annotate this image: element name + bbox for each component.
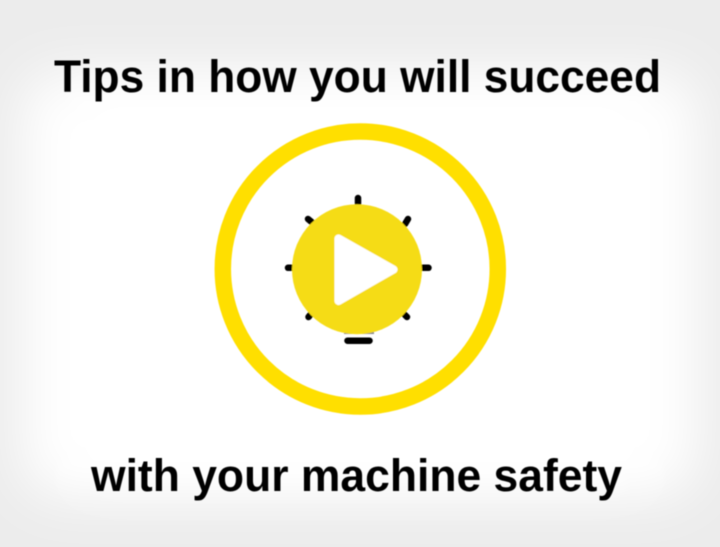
icon: bulb disc	[292, 204, 422, 334]
title: Tips in how you will succeed	[54, 51, 661, 102]
icon: yellow ring	[223, 132, 498, 406]
icon: bulb rays	[288, 198, 428, 341]
icon: light bulb with play button	[288, 198, 428, 341]
icon: bulb base	[344, 332, 374, 334]
icon: play triangle	[338, 238, 394, 301]
caption: with your machine safety	[90, 450, 623, 501]
